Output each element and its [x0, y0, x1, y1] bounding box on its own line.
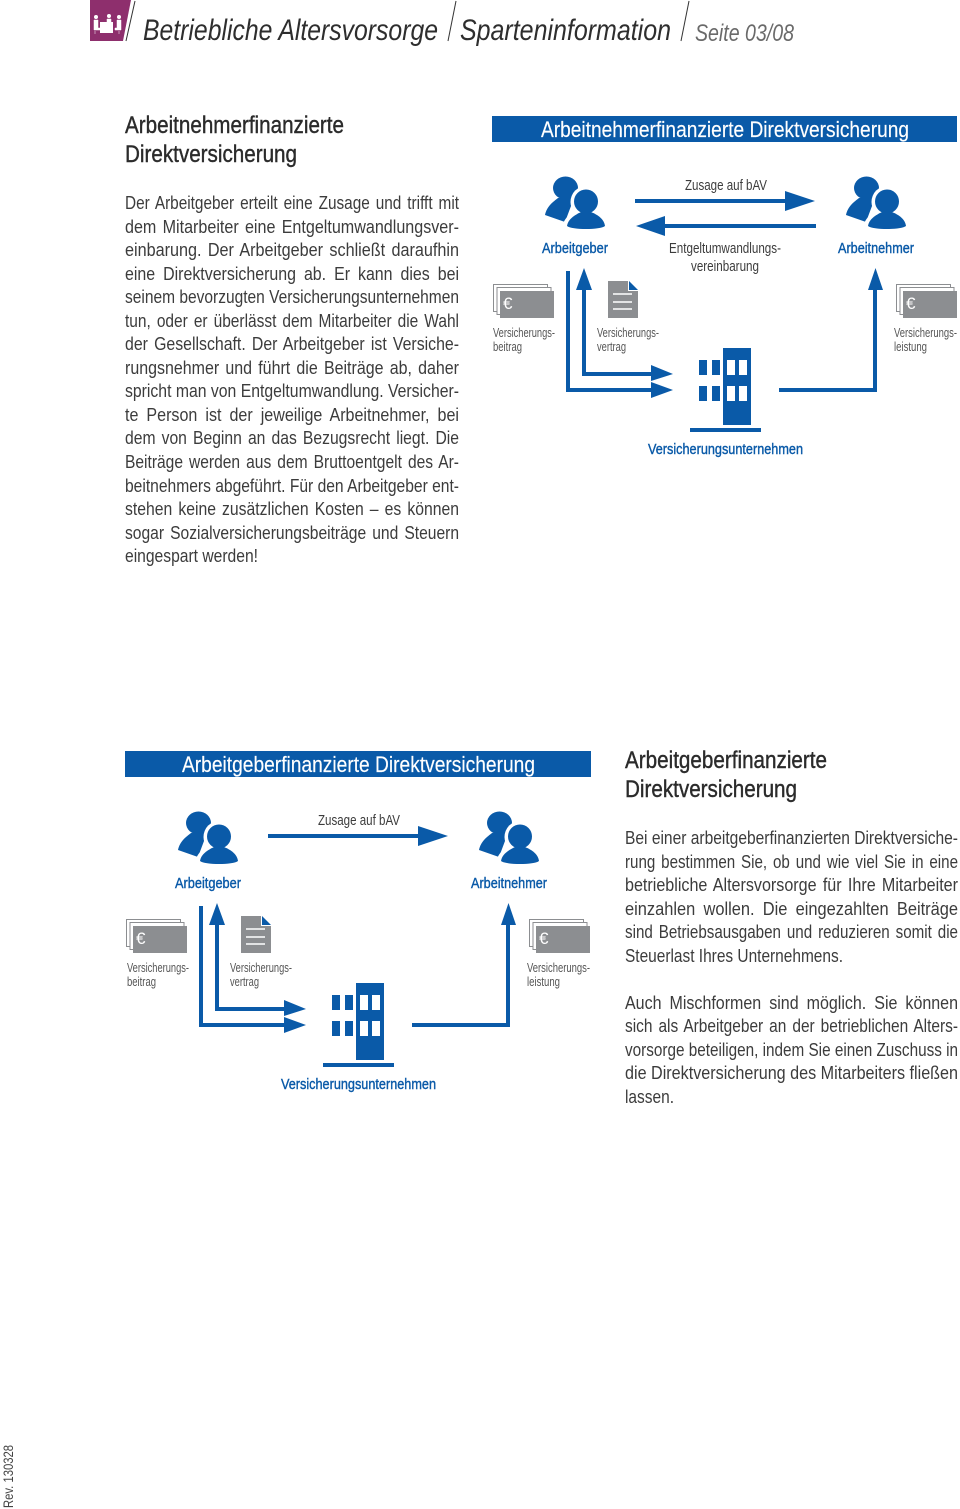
text block: employee financed: einbarung. Der Arbeitgeber schließt daraufhin — [125, 240, 459, 260]
text block: employee financed: spricht man von Entgeltumwandlung. Versicher- — [125, 381, 459, 401]
label: Versicherungsleistung: leistung — [894, 339, 927, 354]
header subtitle: Sparteninformation — [460, 14, 671, 47]
text block: employee financed: eingespart werden! — [125, 546, 258, 566]
icon: insurer building — [323, 983, 394, 1067]
icon: money contribution — [494, 284, 554, 318]
heading: Arbeitnehmerfinanzierte Direktversicherung: Arbeitnehmerfinanzierte — [125, 112, 344, 139]
panel: employee financed diagram — [492, 116, 957, 458]
label: Versicherungsbeitrag: Versicherungs- — [493, 325, 555, 340]
label: Zusage auf bAV: Zusage auf bAV — [685, 177, 767, 194]
text block: employee financed: stehen keine zusätzlichen Kosten – es können — [125, 499, 459, 519]
icon: employer people — [178, 812, 244, 869]
diagram title bar: Arbeitnehmerfinanzierte Direktversicherung — [541, 117, 909, 142]
heading: Arbeitnehmerfinanzierte Direktversicherung: Direktversicherung — [125, 141, 297, 168]
text block: employee financed — [125, 193, 459, 566]
icon: money contribution — [126, 920, 187, 953]
text block: employee financed: tun, oder er überlässt dem Mitarbeiter die Wahl — [125, 311, 459, 331]
icon: employer people — [545, 176, 611, 234]
icon: employee people — [479, 812, 545, 869]
label: Zusage auf bAV: Zusage auf bAV — [318, 812, 400, 829]
panel: employer financed diagram — [125, 751, 591, 1093]
text block: employee financed: eine Direktversicherung ab. Er kann dies bei — [125, 264, 459, 284]
label: Versicherungsvertrag: vertrag — [597, 339, 626, 354]
header slash three — [681, 1, 689, 41]
header slash two — [448, 1, 456, 41]
icon: contract document — [608, 281, 638, 318]
icon: employee people — [846, 176, 912, 234]
label: Versicherungsleistung: leistung — [527, 974, 560, 989]
heading: Arbeitgeberfinanzierte Direktversicherung — [625, 747, 827, 803]
text block: employer financed paragraph two: lassen. — [625, 1087, 674, 1107]
text block: employer financed paragraph one — [625, 828, 958, 966]
heading: Arbeitgeberfinanzierte Direktversicherung: Direktversicherung — [625, 776, 797, 803]
icon: money benefit — [530, 920, 590, 953]
label: Arbeitgeber: Arbeitgeber — [542, 240, 608, 257]
text block: employee financed: Der Arbeitgeber erteilt eine Zusage und trifft mit — [125, 193, 459, 213]
icon: money benefit — [896, 284, 957, 318]
arrow: commitment to employee — [268, 826, 448, 846]
arrow: contract to employer — [576, 268, 673, 381]
diagram title bar: Arbeitgeberfinanzierte Direktversicherung — [182, 752, 535, 777]
page number: Seite 03/08 — [695, 20, 795, 47]
arrow: contract to employer — [209, 903, 306, 1016]
label: Versicherungsbeitrag: beitrag — [493, 339, 522, 354]
label: Arbeitnehmer: Arbeitnehmer — [471, 875, 547, 892]
text block: employer financed paragraph one: Steuerlast Ihres Unternehmens. — [625, 946, 843, 966]
label: Versicherungsvertrag — [230, 960, 292, 989]
label: Entgeltumwandlungsvereinbarung: Entgeltumwandlungs- — [669, 240, 781, 257]
text block: employee financed: seinem bevorzugten Versicherungsunternehmen — [125, 287, 459, 307]
arrow: contribution to insurer — [566, 271, 673, 398]
arrow: benefit to employee — [412, 903, 516, 1027]
arrow: contribution to insurer — [199, 906, 306, 1033]
label: Versicherungsleistung — [527, 960, 590, 989]
label: Versicherungsbeitrag — [493, 325, 555, 354]
text block: employee financed: dem von Beginn an das Bezugsrecht liegt. Die — [125, 428, 459, 448]
text block: employee financed: beitnehmers abgeführt. Für den Arbeitgeber ent- — [125, 476, 459, 496]
label: Versicherungsunternehmen: Versicherungsunternehmen — [648, 441, 803, 458]
revision note: Rev. 130328 — [0, 1445, 16, 1508]
arrow: commitment to employee — [635, 191, 815, 211]
label: Entgeltumwandlungsvereinbarung: vereinbarung — [691, 258, 759, 275]
label: Versicherungsvertrag: Versicherungs- — [230, 960, 292, 975]
icon: meeting table logo — [90, 0, 131, 41]
label: Versicherungsleistung: Versicherungs- — [527, 960, 590, 975]
label: Arbeitnehmer: Arbeitnehmer — [838, 240, 914, 257]
arrow: benefit to employee — [779, 268, 883, 392]
label: Versicherungsbeitrag — [127, 960, 189, 989]
label: Entgeltumwandlungsvereinbarung — [669, 240, 781, 275]
label: Arbeitgeber: Arbeitgeber — [175, 875, 241, 892]
label: Versicherungsvertrag — [597, 325, 659, 354]
text block: employee financed: sogar Sozialversicherungsbeiträge und Steuern — [125, 523, 459, 543]
label: Versicherungsbeitrag: Versicherungs- — [127, 960, 189, 975]
text block: employee financed: te Person ist der jeweilige Arbeitnehmer, bei — [125, 405, 459, 425]
label: Versicherungsbeitrag: beitrag — [127, 974, 156, 989]
arrow: conversion agreement to employer — [636, 216, 816, 236]
icon: insurer building — [690, 348, 761, 432]
label: Versicherungsunternehmen: Versicherungsunternehmen — [281, 1076, 436, 1093]
text block: employee financed: rungsnehmer und führt die Beiträge ab, daher — [125, 358, 459, 378]
label: Versicherungsvertrag: Versicherungs- — [597, 325, 659, 340]
label: Versicherungsleistung — [894, 325, 957, 354]
header — [90, 0, 795, 47]
text block: employee financed: Beiträge werden aus dem Bruttoentgelt des Ar- — [125, 452, 459, 472]
text block: employee financed: der Gesellschaft. Der Arbeitgeber ist Versiche- — [125, 334, 459, 354]
heading: Arbeitgeberfinanzierte Direktversicherung: Arbeitgeberfinanzierte — [625, 747, 827, 774]
icon: contract document — [241, 916, 271, 953]
header title: Betriebliche Altersvorsorge — [143, 14, 438, 47]
text block: employee financed: dem Mitarbeiter eine Entgeltumwandlungsver- — [125, 217, 459, 237]
text block: employer financed paragraph two — [625, 993, 958, 1107]
label: Versicherungsvertrag: vertrag — [230, 974, 259, 989]
heading: Arbeitnehmerfinanzierte Direktversicherung — [125, 112, 344, 168]
header slash — [126, 1, 135, 41]
